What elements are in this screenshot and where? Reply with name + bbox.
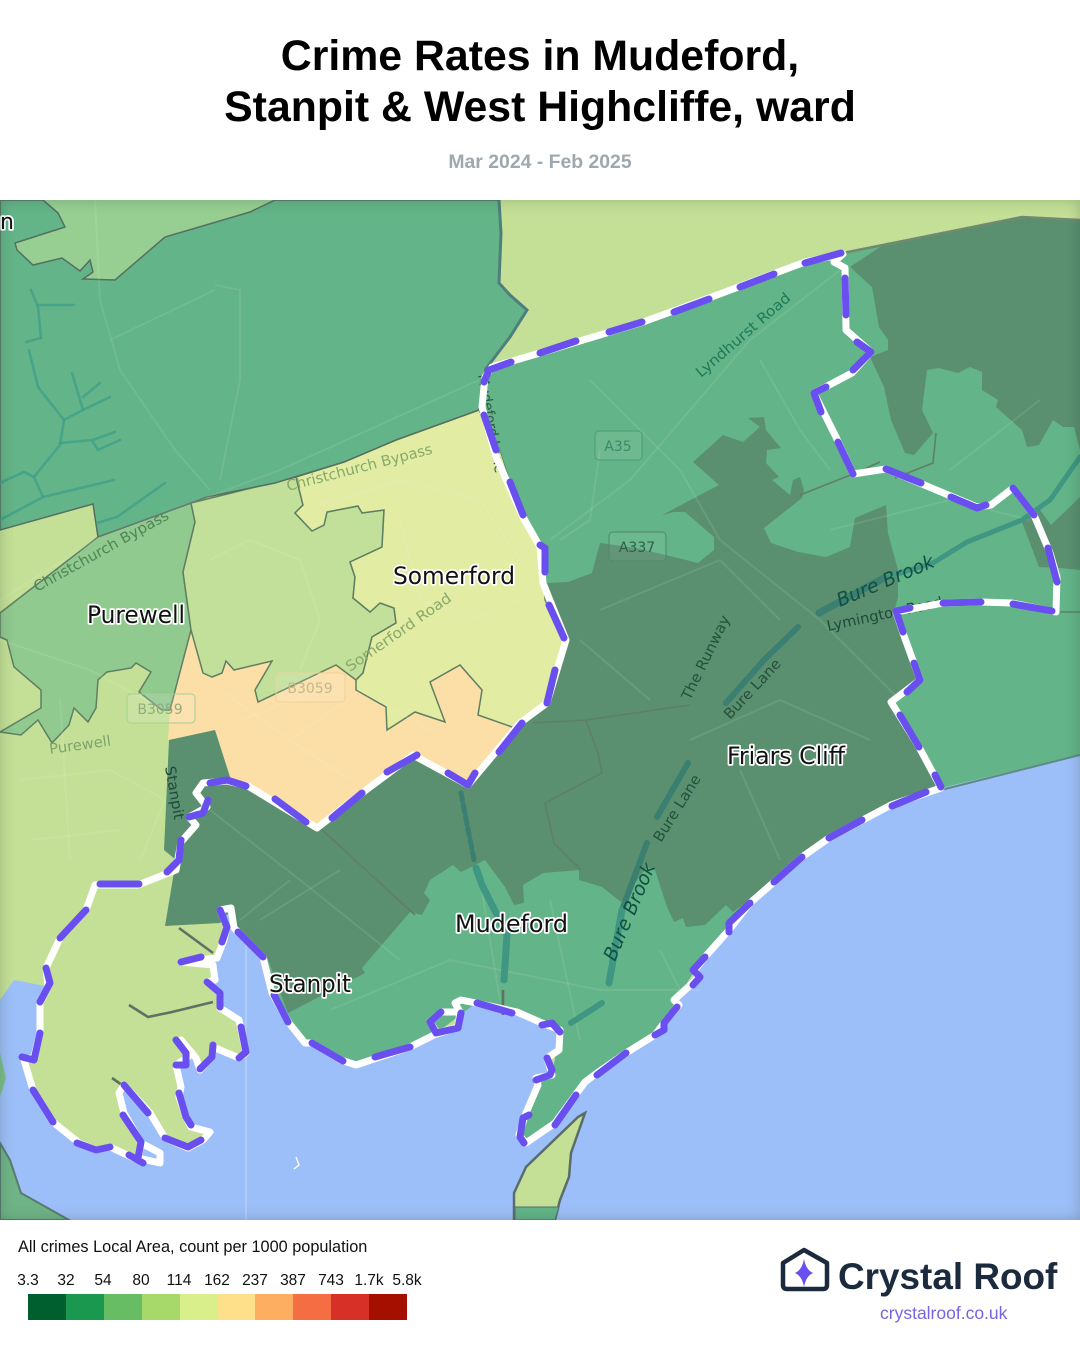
area: Somerford	[295, 410, 565, 730]
Hengistbury dark lines	[112, 928, 503, 1085]
road badge: B3059 east	[276, 673, 345, 702]
road label: The Runway: The Runway	[679, 613, 734, 704]
map edge shading	[0, 200, 1080, 1220]
title: Crime Rates in Mudeford,	[281, 32, 799, 80]
place label: Stanpit: Stanpit	[269, 970, 351, 998]
road label: Bure Lane south: Bure Lane	[651, 772, 705, 845]
road badge: A337: A337	[619, 540, 655, 556]
subtitle: date range: Mar 2024 - Feb 2025	[448, 151, 632, 173]
road label: Bure Lane north: Bure Lane	[721, 656, 785, 723]
legend tick labels: 387	[280, 1272, 306, 1289]
logo wordmark: Crystal Roof	[838, 1256, 1057, 1297]
road badge: B3059 east: B3059	[287, 681, 333, 697]
title: Stanpit & West Highcliffe, ward	[224, 83, 856, 131]
sand spit peninsula	[514, 1113, 585, 1220]
road label: Lyndhurst Road: Lyndhurst Road	[693, 290, 794, 381]
place label: Purewell small: Purewell	[48, 733, 112, 758]
legend tick labels: 5.8k	[392, 1272, 422, 1289]
internal area boundaries	[320, 433, 1080, 915]
area: Purewell	[0, 503, 195, 743]
road label: Stanpit: Stanpit	[161, 765, 186, 821]
spit lower band	[515, 1207, 559, 1220]
legend	[17, 1238, 422, 1320]
icon: house with star	[780, 1248, 830, 1292]
river edge	[485, 200, 527, 370]
ward boundary	[22, 253, 1057, 1163]
area: north-west green	[0, 200, 527, 537]
legend tick labels	[17, 1272, 422, 1289]
area: north-east dark green	[850, 217, 1080, 455]
legend tick labels: 743	[318, 1272, 344, 1289]
water label: Bure Brook south: Bure Brook	[599, 859, 661, 964]
title	[224, 32, 856, 131]
road label: Lymington Road: Lymington Road	[826, 595, 944, 635]
water label: Bure Brook north: Bure Brook	[833, 550, 939, 612]
area: Friars Cliff and Stanpit dark green	[164, 417, 941, 1013]
place label: Somerford: Somerford	[393, 562, 515, 590]
legend colour scale	[28, 1294, 407, 1320]
road label: Mudeford Lane vertical: Mudeford Lane	[474, 373, 507, 474]
area: central light green	[183, 477, 396, 702]
place label: Friars Cliff: Friars Cliff	[727, 742, 845, 770]
base land: lime areas	[0, 200, 1080, 1220]
place label: Mudeford: Mudeford	[455, 910, 568, 938]
area: west Stanpit peach	[168, 620, 545, 828]
legend title: All crimes Local Area, count per 1000 population	[18, 1238, 367, 1256]
ward boundary purple dashes	[22, 253, 1057, 1163]
boat mark	[294, 1157, 299, 1169]
legend tick labels: 1.7k	[354, 1272, 384, 1289]
road label: Christchurch Bypass lower: Christchurch Bypass	[31, 508, 172, 595]
legend tick labels: 54	[94, 1272, 112, 1289]
legend tick labels: 32	[57, 1272, 75, 1289]
logo url: crystalroof.co.uk	[880, 1303, 1007, 1323]
logo: Crystal Roof	[780, 1248, 1058, 1323]
road label: Christchurch Bypass upper: Christchurch Bypass	[285, 442, 434, 495]
road network	[0, 200, 1040, 1040]
stream: Bure Brook	[461, 457, 1080, 1023]
map panel	[0, 200, 1080, 1220]
road label: Somerford Road: Somerford Road	[343, 590, 455, 675]
legend tick labels: 114	[167, 1272, 191, 1289]
legend tick labels: 3.3	[17, 1272, 39, 1289]
area: east edge dark green	[1022, 497, 1080, 570]
area: ward green	[263, 217, 1080, 1143]
land south-west corner	[0, 1143, 69, 1220]
road badge: B3059 west	[127, 694, 195, 723]
place label: n (cropped): n	[0, 210, 14, 235]
coast edge east	[941, 755, 1080, 790]
northern boundary line	[843, 217, 1080, 253]
road badge: A35	[595, 431, 642, 460]
ward boundary white casing	[24, 254, 1057, 1163]
road badge: A337	[609, 532, 666, 561]
streams north-west	[0, 290, 165, 523]
sea	[0, 755, 1080, 1220]
land west edge	[0, 1053, 6, 1097]
area: light green top left	[15, 200, 275, 280]
legend tick labels: 237	[242, 1272, 268, 1289]
meridian line	[245, 940, 247, 1220]
place label: Purewell: Purewell	[87, 601, 185, 629]
legend tick labels: 80	[132, 1272, 150, 1289]
road badge: A35: A35	[604, 439, 632, 455]
legend tick labels: 162	[204, 1272, 230, 1289]
road badge: B3059 west: B3059	[137, 702, 183, 718]
